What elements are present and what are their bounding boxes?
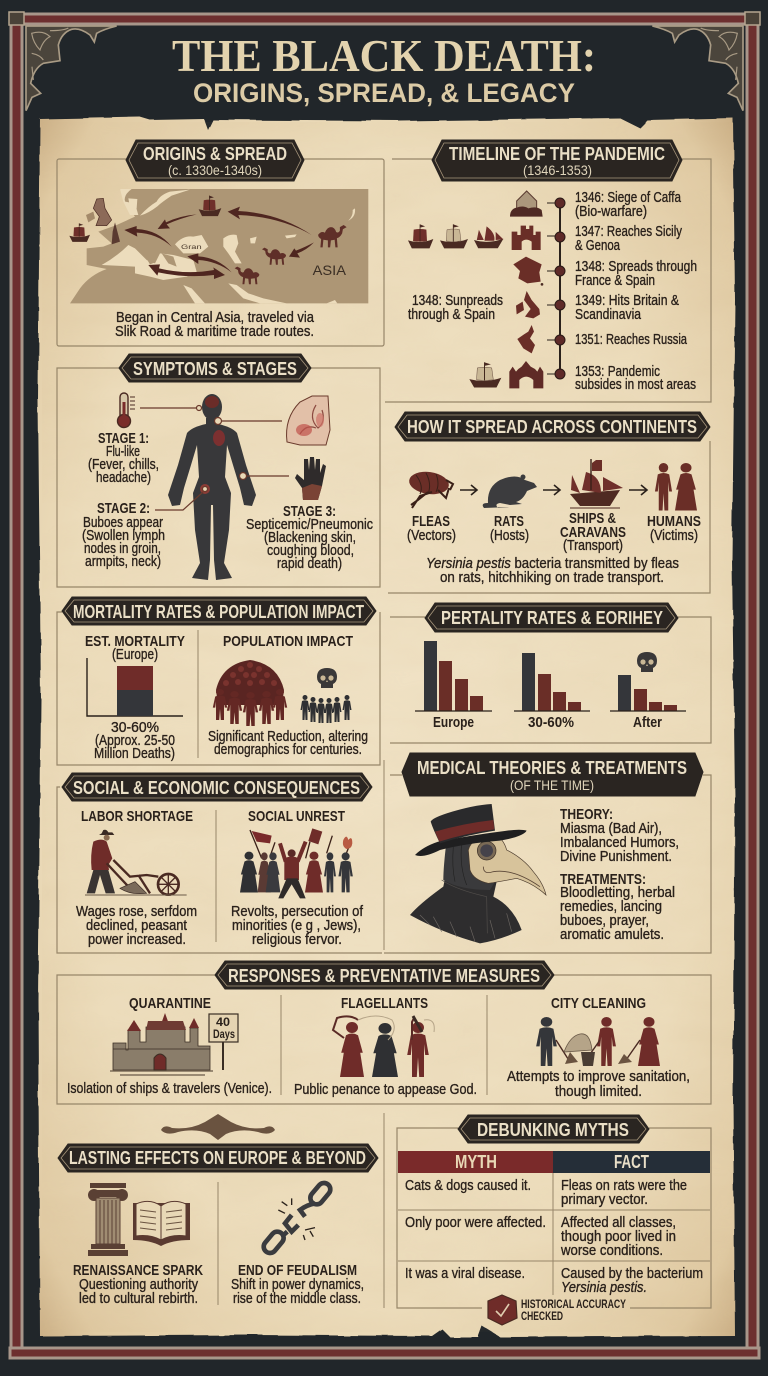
labor shortage: LABOR SHORTAGE <box>81 808 193 825</box>
text: stage 1: STAGE 1: <box>98 430 149 447</box>
chart: estimated mortality: (Europe) <box>112 646 158 663</box>
badge: historical accuracy checked <box>488 1295 626 1325</box>
illustration: plague doctor <box>410 804 546 943</box>
text: stage 3: rapid death) <box>277 555 342 572</box>
icon: workers cleaning <box>536 1017 660 1066</box>
text: stage 3 <box>246 503 373 572</box>
caption: origins: Began in Central Asia, traveled via <box>116 309 315 326</box>
table: myth vs fact: It was a viral disease. <box>405 1265 525 1282</box>
decorative ornament <box>161 1114 275 1140</box>
text: timeline entries: 1346: Siege of Caffa <box>575 189 682 206</box>
text: timeline entries: 1348: Spreads through <box>575 258 697 275</box>
text: timeline entries <box>408 189 697 393</box>
banner: responses heading <box>215 961 554 989</box>
social unrest <box>231 808 364 948</box>
text: stage 3: Septicemic/Pneumonic <box>246 516 373 533</box>
text: spread chain labels: RATS <box>494 513 524 530</box>
chart: estimated mortality: 30-60% <box>111 719 159 736</box>
icon: farmer with plough <box>85 830 187 895</box>
icon: sailing ship <box>570 459 623 508</box>
text: timeline entries: & Genoa <box>575 237 620 254</box>
population impact: demographics for centuries. <box>214 741 362 758</box>
banner: how it spread heading: HOW IT SPREAD ACROSS CONTINENTS <box>407 417 697 437</box>
banner: lasting effects heading <box>58 1144 378 1172</box>
social unrest: Revolts, persecution of <box>231 903 364 920</box>
text: stage 3: STAGE 3: <box>283 503 336 520</box>
caption: origins <box>115 309 315 340</box>
chart: estimated mortality <box>85 633 185 762</box>
banner: origins heading: (c. 1330e-1340s) <box>168 162 262 178</box>
icon: open book <box>133 1201 190 1246</box>
text: timeline entries: France & Spain <box>575 272 655 289</box>
text: stage 1: Flu-like <box>106 443 140 460</box>
banner: origins heading: ORIGINS & SPREAD <box>143 144 287 164</box>
caption: bacteria transmission <box>426 555 679 586</box>
text: treatments: buboes, prayer, <box>560 912 649 929</box>
text: timeline entries: subsides in most areas <box>575 376 696 393</box>
title: THE BLACK DEATH: <box>172 30 596 81</box>
quarantine <box>67 995 272 1097</box>
arrow <box>543 485 560 495</box>
icon: large crowd <box>213 660 287 726</box>
table: myth vs fact: FACT <box>614 1152 649 1172</box>
banner: pertality heading: PERTALITY RATES & EORIHEY <box>441 608 663 628</box>
icons: timeline events <box>408 191 543 388</box>
text: timeline entries: 1347: Reaches Sicily <box>575 223 682 240</box>
figure: human body <box>168 394 256 580</box>
table: myth vs fact: though poor lived in <box>561 1228 676 1245</box>
table: myth vs fact: MYTH <box>455 1152 497 1172</box>
text: timeline entries: Scandinavia <box>575 306 642 323</box>
icon: flea <box>408 469 453 508</box>
callout lines <box>140 406 289 510</box>
text: stage 3: (Blackening skin, <box>264 529 356 546</box>
icon: walled castle <box>110 1013 213 1075</box>
icon: rat <box>483 474 537 508</box>
banner: medical heading <box>402 753 703 796</box>
map of trade routes: Gran <box>181 245 202 251</box>
icon: skull <box>637 652 657 672</box>
map of trade routes: ASIA <box>313 262 347 278</box>
panel: social and economic consequences <box>57 760 384 953</box>
renaissance spark: RENAISSANCE SPARK <box>73 1262 203 1279</box>
title: ORIGINS, SPREAD, & LEGACY <box>193 78 575 108</box>
table: myth vs fact: Affected all classes, <box>561 1214 676 1231</box>
chart: estimated mortality: EST. MORTALITY <box>85 633 185 650</box>
chart: estimated mortality: (Approx. 25-50 <box>95 732 175 749</box>
arrow <box>460 485 477 495</box>
map of trade routes <box>69 189 368 303</box>
panel: origins and spread <box>57 140 384 346</box>
panel: how it spread <box>388 412 710 593</box>
panel: medical theories <box>384 753 711 953</box>
timeline line and nodes <box>547 198 565 379</box>
text: treatments: aromatic amulets. <box>560 926 664 943</box>
banner: symptoms heading <box>119 354 311 382</box>
banner: medical heading: (OF THE TIME) <box>510 777 594 793</box>
table: myth vs fact: Caused by the bacterium <box>561 1265 703 1282</box>
table: myth vs fact <box>398 1151 710 1296</box>
text: theory: Imbalanced Humors, <box>560 834 679 851</box>
banner: debunking heading: DEBUNKING MYTHS <box>477 1120 629 1140</box>
labor shortage <box>76 808 197 948</box>
bar chart: after <box>610 675 686 731</box>
population impact: POPULATION IMPACT <box>223 633 353 650</box>
text: stage 2: nodes in groin, <box>84 540 161 557</box>
chart: estimated mortality: Million Deaths) <box>94 745 175 762</box>
caption: bacteria transmission: Yersinia pestis bacteria transmitted by fleas <box>426 555 679 572</box>
text: theory: THEORY: <box>560 806 613 823</box>
text: timeline entries: 1353: Pandemic <box>575 363 660 380</box>
population impact <box>208 633 368 758</box>
text: stage 3: coughing blood, <box>267 542 354 559</box>
banner: origins heading <box>126 140 304 181</box>
panel: mortality and population <box>57 597 380 765</box>
icon: small group of survivors <box>300 695 352 723</box>
text: timeline entries: (Bio-warfare) <box>575 203 647 220</box>
table: myth vs fact: Yersinia pestis. <box>561 1279 647 1296</box>
renaissance spark <box>73 1183 203 1307</box>
text: treatments <box>560 871 675 943</box>
banner: social heading <box>62 773 372 801</box>
text: treatments: Bloodletting, herbal <box>560 884 675 901</box>
social unrest: religious fervor. <box>252 931 342 948</box>
city cleaning: though limited. <box>555 1083 642 1100</box>
banner: timeline heading: TIMELINE OF THE PANDEMIC <box>449 144 665 164</box>
text: stage 1 <box>88 430 159 486</box>
icon: thermometer <box>118 393 135 428</box>
panel: lasting effects <box>58 1113 384 1308</box>
icon: human victims <box>655 463 697 510</box>
banner: mortality heading: MORTALITY RATES & POPULATION IMPACT <box>73 602 364 622</box>
text: spread chain labels: CARAVANS <box>560 524 626 541</box>
banner: symptoms heading: SYMPTOMS & STAGES <box>133 359 297 379</box>
badge: historical accuracy checked: CHECKED <box>521 1311 563 1323</box>
banner: how it spread heading <box>395 412 710 441</box>
icon: protesting crowd <box>240 828 353 898</box>
text: spread chain labels: (Hosts) <box>490 527 529 544</box>
icon: swollen armpit <box>287 396 330 445</box>
banner: timeline heading <box>432 140 682 181</box>
text: spread chain labels: HUMANS <box>647 513 701 530</box>
flagellants <box>294 995 477 1098</box>
panel: symptoms and stages <box>57 354 380 587</box>
text: spread chain labels: FLEAS <box>412 513 450 530</box>
labor shortage: Wages rose, serfdom <box>76 903 197 920</box>
text: stage 2 <box>82 500 165 570</box>
text: theory: Divine Punishment. <box>560 848 672 865</box>
renaissance spark: Questioning authority <box>79 1276 198 1293</box>
quarantine: Isolation of ships & travelers (Venice). <box>67 1080 272 1097</box>
icon: 40 days sign <box>209 1014 238 1070</box>
panel: responses and preventative measures <box>57 961 711 1104</box>
bar chart: 30-60%: 30-60% <box>528 714 574 731</box>
banner: mortality heading <box>62 597 376 625</box>
city cleaning: Attempts to improve sanitation, <box>507 1068 690 1085</box>
banner: lasting effects heading: LASTING EFFECTS ON EUROPE & BEYOND <box>69 1148 366 1168</box>
text: stage 1: headache) <box>96 469 151 486</box>
panel: pertality bar charts <box>390 603 711 743</box>
text: spread chain labels: SHIPS & <box>569 510 616 527</box>
text: timeline entries: 1348: Sunpreads <box>412 292 503 309</box>
text: spread chain labels: (Vectors) <box>407 527 456 544</box>
table: myth vs fact: Fleas on rats were the <box>561 1177 687 1194</box>
icon: broken chain <box>261 1180 333 1256</box>
text: spread chain labels <box>407 510 701 554</box>
end of feudalism <box>231 1180 364 1307</box>
icon: skull above survivors <box>317 668 337 688</box>
badge: historical accuracy checked: HISTORICAL ACCURACY <box>521 1299 626 1311</box>
text: timeline entries: through & Spain <box>408 306 495 323</box>
text: spread chain labels: (Transport) <box>563 537 623 554</box>
text: stage 1: (Fever, chills, <box>88 456 159 473</box>
text: stage 2: (Swollen lymph <box>82 527 165 544</box>
table: myth vs fact: primary vector. <box>561 1191 648 1208</box>
caption: origins: Slik Road & maritime trade routes. <box>115 323 314 340</box>
text: timeline entries: 1351: Reaches Russia <box>575 331 687 348</box>
text: stage 2: Buboes appear <box>83 514 163 531</box>
title <box>172 30 596 108</box>
banner: social heading: SOCIAL & ECONOMIC CONSEQUENCES <box>73 778 360 798</box>
bar chart: Europe <box>415 641 492 731</box>
quarantine: QUARANTINE <box>129 995 211 1012</box>
text: treatments: remedies, lancing <box>560 898 662 915</box>
text: theory <box>560 806 679 865</box>
text: spread chain labels: (Victims) <box>650 527 698 544</box>
icon: column <box>88 1183 128 1256</box>
caption: bacteria transmission: on rats, hitchhiking on trade transport. <box>440 569 664 586</box>
table: myth vs fact: Cats & dogs caused it. <box>405 1177 531 1194</box>
flagellants: Public penance to appease God. <box>294 1081 477 1098</box>
banner: debunking heading <box>458 1115 649 1143</box>
labor shortage: power increased. <box>88 931 186 948</box>
panel: debunking myths <box>397 1115 711 1325</box>
city cleaning <box>507 995 690 1100</box>
renaissance spark: led to cultural rebirth. <box>79 1290 198 1307</box>
icon: 40 days sign: 40 <box>216 1015 230 1029</box>
end of feudalism: END OF FEUDALISM <box>238 1262 357 1279</box>
arrow <box>629 485 647 495</box>
banner: timeline heading: (1346-1353) <box>523 162 592 178</box>
table: myth vs fact: worse conditions. <box>560 1242 663 1259</box>
social unrest: SOCIAL UNREST <box>248 808 345 825</box>
bar chart: after: After <box>633 714 662 731</box>
text: timeline entries: 1349: Hits Britain & <box>575 292 679 309</box>
bar chart: 30-60% <box>514 653 590 731</box>
icon: blackened hand <box>295 457 326 500</box>
bar chart: Europe: Europe <box>433 714 474 731</box>
panel: timeline <box>385 140 711 402</box>
icon: 40 days sign: Days <box>213 1027 235 1041</box>
text: theory: Miasma (Bad Air), <box>560 820 662 837</box>
end of feudalism: Shift in power dynamics, <box>231 1276 364 1293</box>
population impact: Significant Reduction, altering <box>208 728 368 745</box>
table: myth vs fact: Only poor were affected. <box>405 1214 546 1231</box>
text: stage 2: armpits, neck) <box>85 553 161 570</box>
flagellants: FLAGELLANTS <box>341 995 428 1012</box>
icon: three flagellants <box>333 1016 434 1077</box>
labor shortage: declined, peasant <box>86 917 188 934</box>
banner: responses heading: RESPONSES & PREVENTATIVE MEASURES <box>228 966 540 986</box>
banner: medical heading: MEDICAL THEORIES & TREATMENTS <box>417 758 687 778</box>
banner: pertality heading <box>425 603 678 632</box>
city cleaning: CITY CLEANING <box>551 995 646 1012</box>
text: stage 2: STAGE 2: <box>97 500 150 517</box>
end of feudalism: rise of the middle class. <box>233 1290 361 1307</box>
text: treatments: TREATMENTS: <box>560 871 646 888</box>
social unrest: minorities (e g , Jews), <box>232 917 361 934</box>
